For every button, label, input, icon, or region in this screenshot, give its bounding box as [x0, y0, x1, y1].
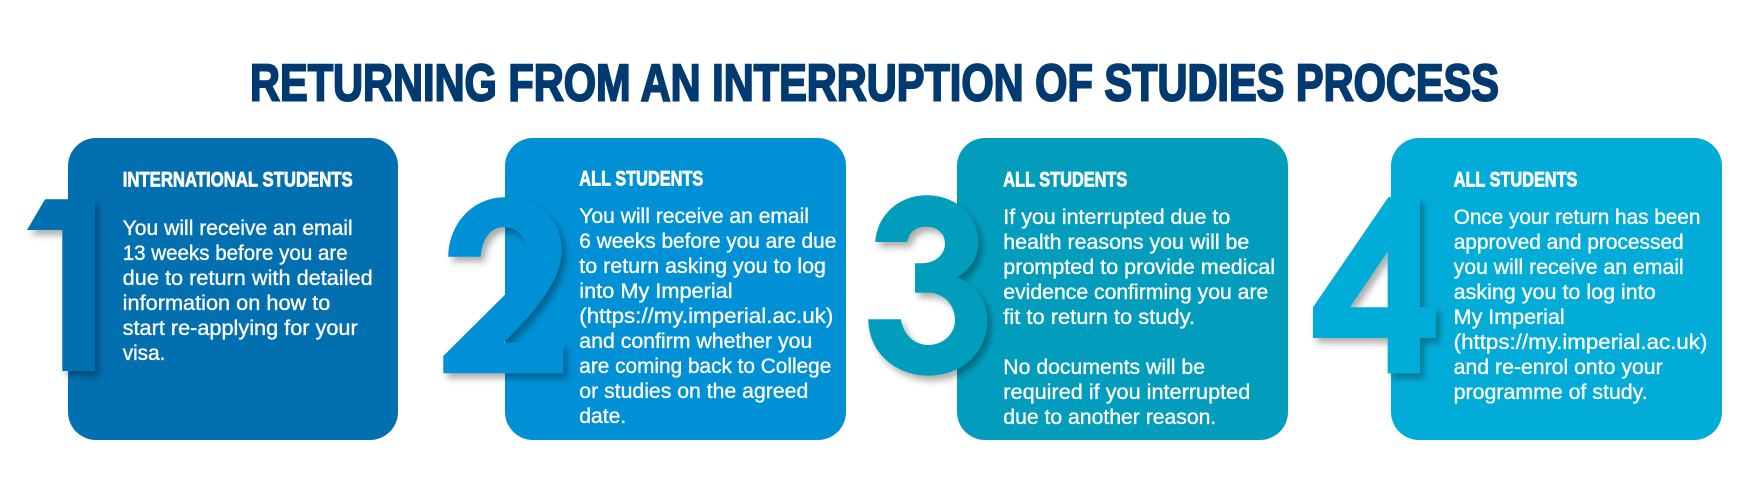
card 1 body text: due to return with detailed [123, 267, 373, 290]
card 3 body text: required if you interrupted [1003, 381, 1250, 404]
panel: step 3 all students [868, 138, 1288, 440]
card 2 body text: into My Imperial [579, 280, 733, 303]
card 3 body text: prompted to provide medical [1003, 256, 1275, 279]
card 4 body text: you will receive an email [1454, 256, 1684, 279]
card 3 body text: If you interrupted due to [1003, 206, 1230, 229]
card 4 body text: and re-enrol onto your [1454, 356, 1663, 379]
card 1 body text: information on how to [123, 292, 330, 315]
card 1 body text: start re-applying for your [123, 317, 358, 340]
card 2 background [505, 138, 846, 440]
card 1 body text: visa. [123, 342, 165, 365]
card 2 body text: are coming back to College [579, 355, 831, 378]
card 4 body text [1454, 206, 1707, 404]
card 3 body text: evidence confirming you are [1003, 281, 1268, 304]
card 1 body text: 13 weeks before you are [123, 242, 348, 265]
panel: step 4 all students [1313, 138, 1722, 440]
card 4 background [1391, 138, 1722, 440]
card 1 background [68, 138, 398, 440]
card 3 body text: health reasons you will be [1003, 231, 1249, 254]
icon: numeral 2 [443, 197, 563, 373]
card 2 body text: or studies on the agreed [579, 380, 808, 403]
card 4 heading: ALL STUDENTS [1454, 168, 1577, 192]
card 3 body text: fit to return to study. [1003, 306, 1195, 329]
card 2 body text: 6 weeks before you are due [579, 230, 836, 253]
card 1 body text [123, 217, 373, 365]
card 4 body text: My Imperial [1454, 306, 1565, 329]
card 4 body text: programme of study. [1454, 381, 1648, 404]
card 4 body text: (https://my.imperial.ac.uk) [1454, 331, 1707, 354]
card 2 body text: You will receive an email [579, 205, 809, 228]
card 4 body text: Once your return has been [1454, 206, 1700, 229]
icon: numeral 4 [1313, 197, 1436, 373]
card 3 background [957, 138, 1288, 440]
card 2 body text: to return asking you to log [579, 255, 826, 278]
card 2 body text: date. [579, 405, 626, 428]
card 4 body text: asking you to log into [1454, 281, 1656, 304]
card 2 body text: (https://my.imperial.ac.uk) [579, 305, 833, 328]
card 1 body text: You will receive an email [123, 217, 353, 240]
card 3 body text: due to another reason. [1003, 406, 1216, 429]
card 1 heading: INTERNATIONAL STUDENTS [123, 168, 353, 192]
card 4 body text: approved and processed [1454, 231, 1684, 254]
card 3 body text [1003, 206, 1275, 429]
card 2 body text: and confirm whether you [579, 330, 812, 353]
card 2 heading: ALL STUDENTS [579, 166, 703, 190]
card 2 body text [579, 205, 836, 428]
panel: step 1 international students [27, 138, 398, 440]
icon: numeral 1 [27, 199, 95, 371]
panel: step 2 all students [443, 138, 846, 440]
card 3 heading: ALL STUDENTS [1003, 168, 1127, 192]
card 3 body text: No documents will be [1003, 356, 1205, 379]
icon: numeral 3 [868, 195, 987, 376]
